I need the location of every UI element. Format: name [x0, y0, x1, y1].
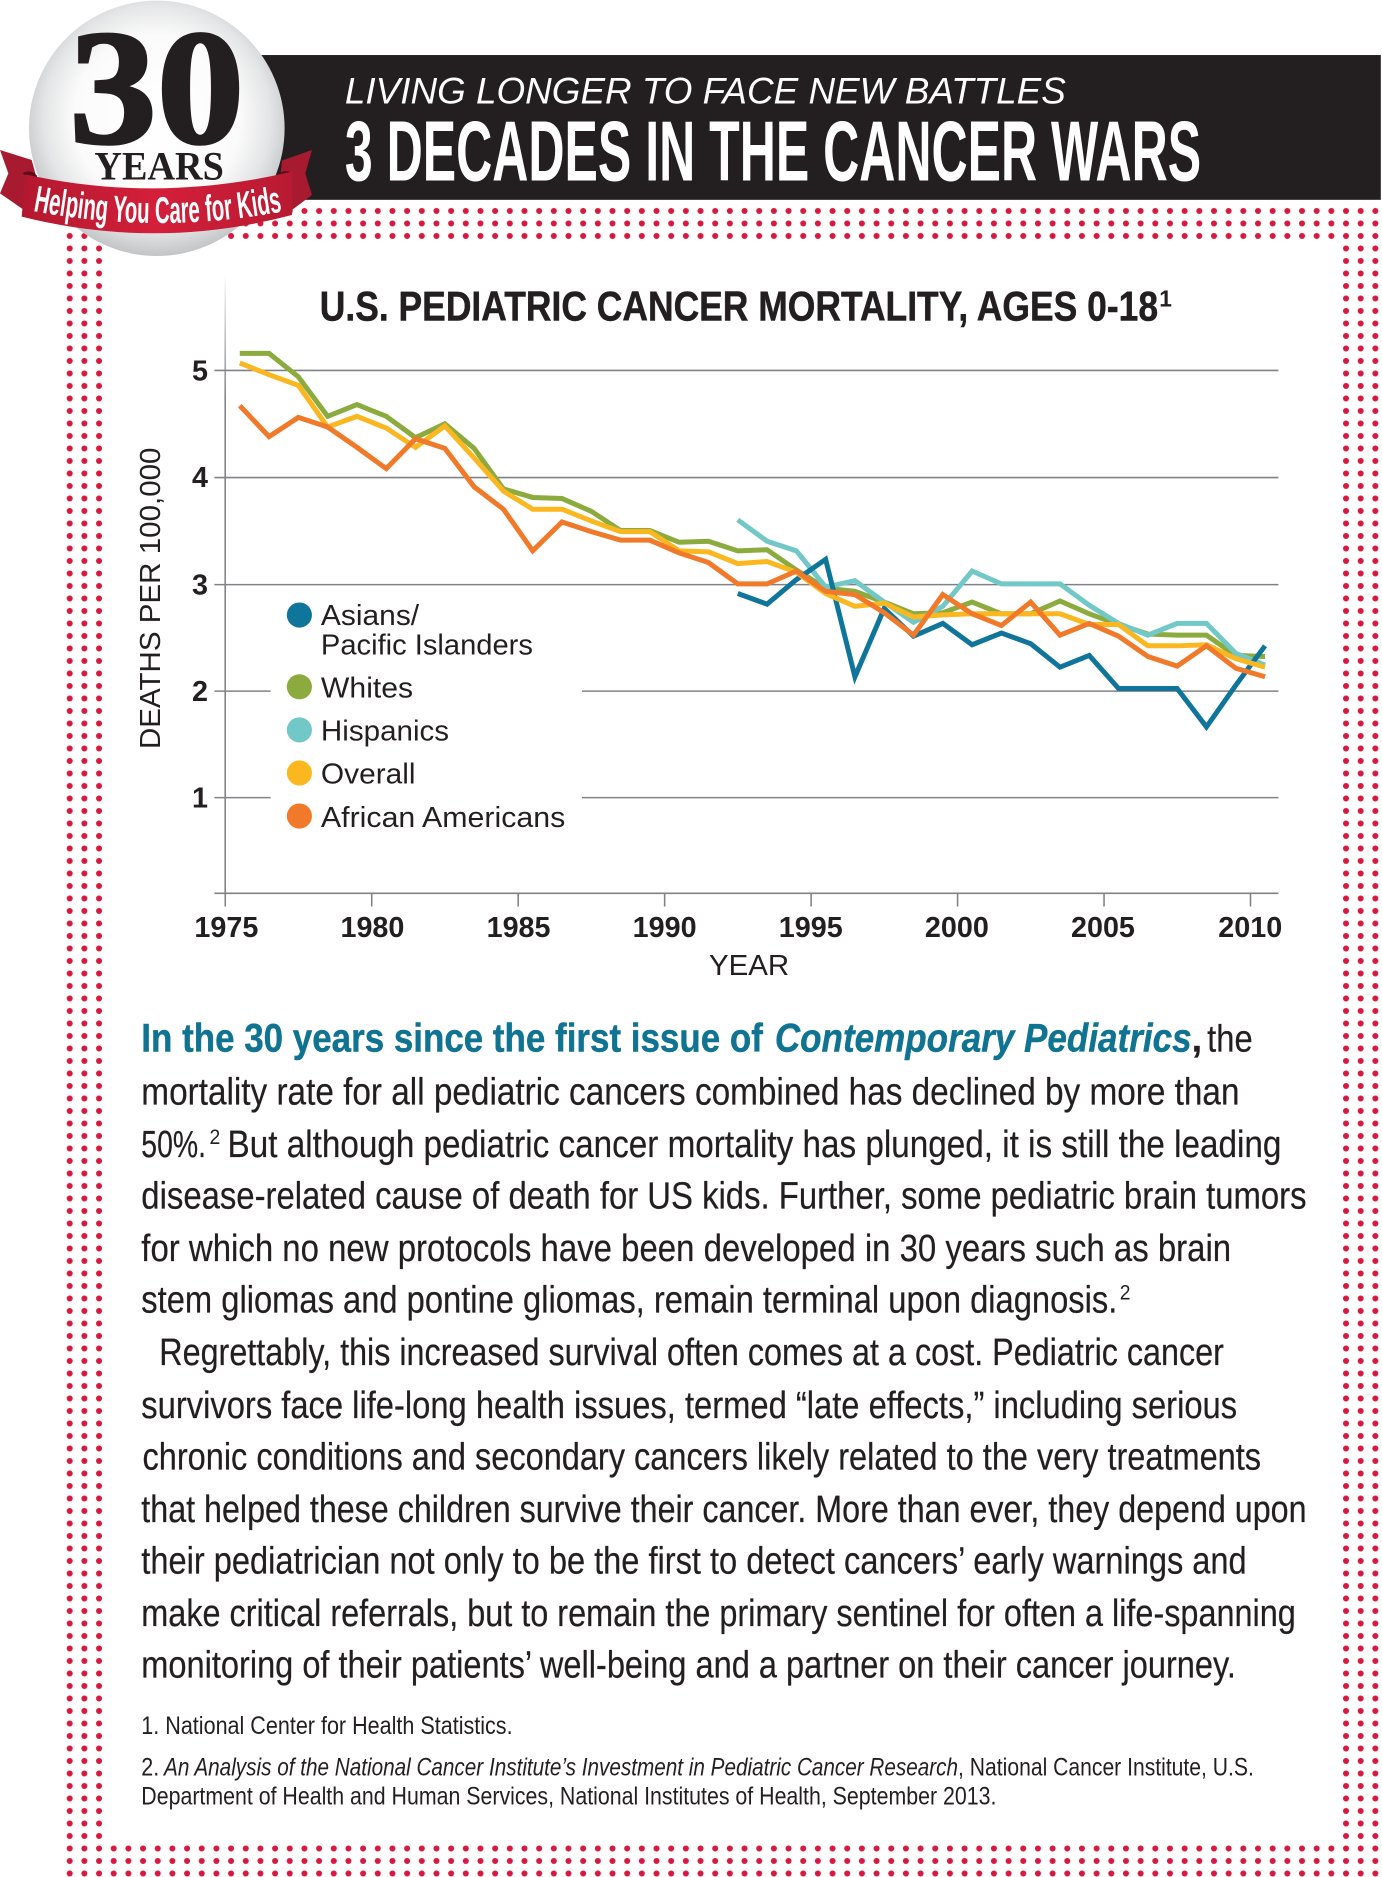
- footnotes: , National Cancer Institute, U.S.: [958, 1754, 1254, 1782]
- x axis title: YEAR: [709, 950, 789, 982]
- y axis title: DEATHS PER 100,000: [135, 448, 167, 749]
- legend: [287, 600, 565, 834]
- legend: Overall: Overall: [321, 759, 416, 791]
- ribbon: [0, 150, 312, 234]
- chart title: U.S. PEDIATRIC CANCER MORTALITY, AGES 0-18: [320, 283, 1158, 330]
- y axis labels: 3: [192, 570, 208, 602]
- badge: 30 years: [0, 0, 312, 256]
- x axis labels: 1995: [779, 912, 843, 944]
- y axis labels: 2: [192, 676, 208, 708]
- x axis labels: 1985: [487, 912, 551, 944]
- x axis labels: 1980: [340, 912, 404, 944]
- ribbon text: Helping You Care for Kids: [34, 186, 281, 228]
- badge ball: [29, 1, 285, 256]
- y axis labels: 4: [192, 462, 208, 494]
- axes and gridlines: [214, 274, 1278, 906]
- paragraph one: [141, 1070, 1307, 1321]
- paragraph one: mortality rate for all pediatric cancers combined has declined by more than: [141, 1070, 1239, 1112]
- legend: Whites: Whites: [321, 673, 413, 705]
- footnotes: 1. National Center for Health Statistics.: [141, 1712, 513, 1740]
- paragraph two: Regrettably, this increased survival often comes at a cost. Pediatric cancer: [159, 1331, 1224, 1373]
- x axis labels: 1975: [194, 912, 258, 944]
- chart: [135, 274, 1282, 982]
- paragraph one: stem gliomas and pontine gliomas, remain terminal upon diagnosis.: [141, 1279, 1117, 1321]
- badge number 30: 30: [69, 0, 244, 179]
- legend: Asians/Pacific Islanders: Asians/: [321, 600, 419, 632]
- x axis labels: 1990: [633, 912, 697, 944]
- header kicker: LIVING LONGER TO FACE NEW BATTLES: [345, 70, 1066, 111]
- x axis labels: 2000: [925, 912, 989, 944]
- chart title: 1: [1159, 285, 1172, 311]
- legend: Asians/Pacific Islanders: Pacific Islanders: [321, 630, 533, 662]
- body text: [141, 1017, 1307, 1810]
- footnotes: 2.: [141, 1754, 159, 1782]
- paragraph one: 2: [1120, 1280, 1131, 1304]
- y axis labels: 5: [192, 356, 208, 387]
- data lines: [240, 353, 1265, 727]
- header banner: [240, 55, 1381, 200]
- x axis labels: [194, 912, 1282, 944]
- legend: African Americans: African Americans: [321, 802, 565, 834]
- paragraph one: 50%.: [141, 1123, 206, 1165]
- paragraph two: [141, 1331, 1307, 1686]
- paragraph two: survivors face life-long health issues, termed “late effects,” including serious: [141, 1384, 1237, 1426]
- paragraph one: for which no new protocols have been developed in 30 years such as brain: [141, 1227, 1231, 1269]
- y axis labels: 1: [192, 783, 208, 815]
- lead sentence: Contemporary Pediatrics: [775, 1017, 1192, 1061]
- x axis labels: 2005: [1071, 912, 1135, 944]
- badge word YEARS: YEARS: [94, 144, 224, 189]
- legend: Asians/Pacific Islanders: [287, 600, 533, 662]
- y axis labels: [192, 356, 208, 815]
- lead sentence: ,: [1192, 1018, 1202, 1060]
- lead sentence: the: [1207, 1018, 1253, 1060]
- x axis labels: 2010: [1218, 912, 1282, 944]
- lead sentence: [141, 1017, 1253, 1061]
- lead sentence: In the 30 years since the first issue of: [141, 1017, 764, 1061]
- footnotes: Department of Health and Human Services, National Institutes of Health, September 2013.: [141, 1782, 996, 1810]
- legend: Whites: [287, 673, 413, 705]
- paragraph two: monitoring of their patients’ well-being and a partner on their cancer journey.: [141, 1644, 1236, 1686]
- footnotes: An Analysis of the National Cancer Institute’s Investment in Pediatric Cancer Research: [162, 1754, 958, 1782]
- footnotes: [141, 1712, 1254, 1810]
- paragraph one: 2: [210, 1125, 220, 1149]
- legend: Hispanics: Hispanics: [321, 716, 449, 748]
